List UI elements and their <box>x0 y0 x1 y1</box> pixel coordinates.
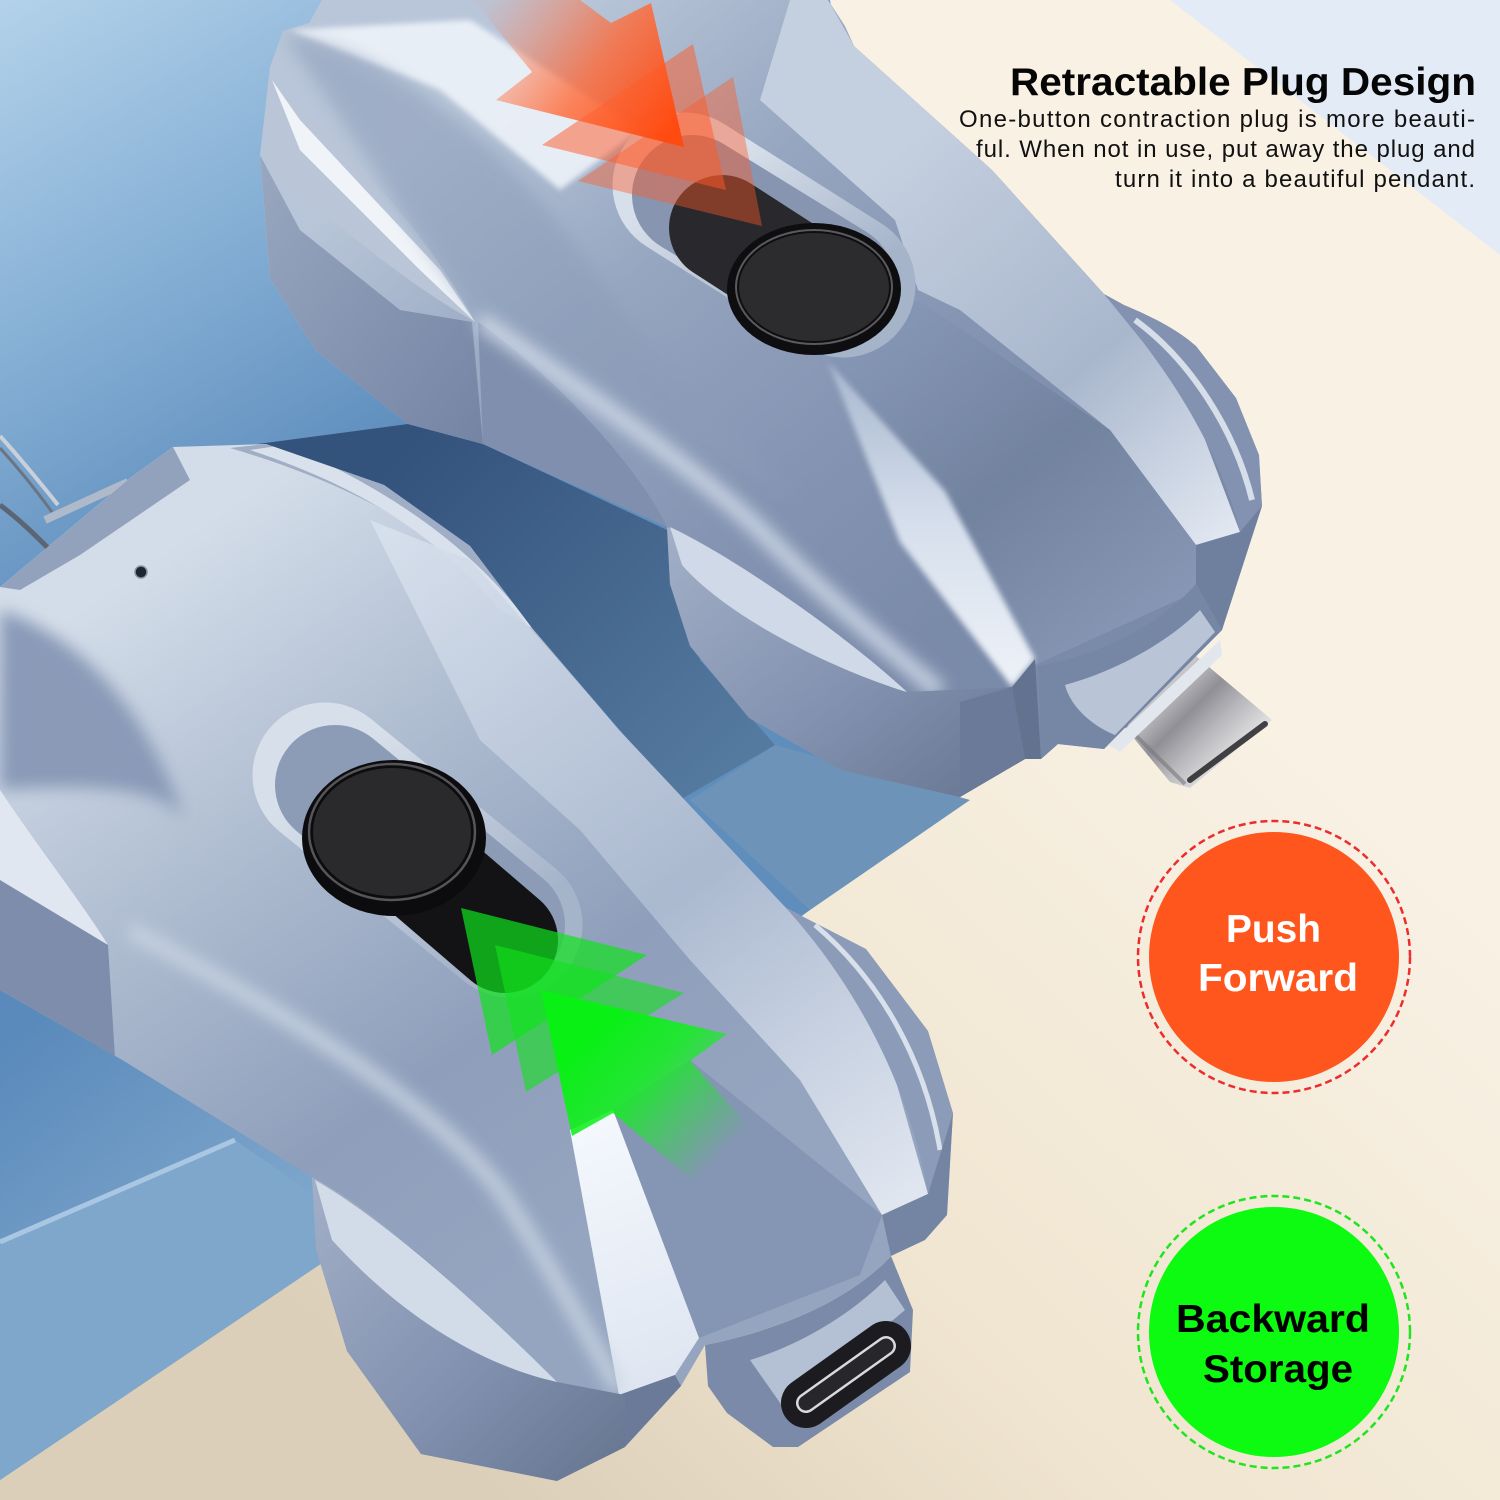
description text: One-button contraction plug is more beauti- <box>959 106 1475 133</box>
slot opening <box>722 228 815 288</box>
rear fender dark side <box>260 155 483 444</box>
hood dark centre <box>613 1060 882 1338</box>
USB-C plug <box>1117 656 1272 788</box>
rear window fin <box>265 80 475 322</box>
port housing <box>1038 584 1222 759</box>
USB-C socket <box>806 1346 886 1403</box>
badge: push forward: Forward <box>1198 957 1358 1000</box>
rear-right fender <box>1104 294 1262 532</box>
side panel <box>478 322 667 527</box>
USB-C port housing <box>705 1256 913 1447</box>
car body <box>0 444 953 1481</box>
background: pale blue top right corner <box>1170 0 1500 255</box>
hood dark centre <box>920 376 1196 664</box>
front wheel arch <box>667 527 1025 797</box>
slot recess <box>692 195 835 283</box>
background: blue surface <box>0 0 970 1480</box>
top end plate <box>0 447 190 590</box>
rear fender <box>0 610 185 820</box>
front wheel arch <box>312 1177 625 1481</box>
button slot ring <box>685 185 843 285</box>
rear roof dome <box>230 444 512 602</box>
title: Retractable Plug Design <box>1010 61 1476 104</box>
heading and description <box>959 61 1476 193</box>
badge: backward storage <box>1138 1196 1410 1468</box>
badge: push forward: Push <box>1226 908 1321 951</box>
body crease highlight <box>480 320 940 692</box>
key ring <box>0 436 128 548</box>
rear roof curve <box>287 32 588 334</box>
body crease highlight <box>130 930 619 1390</box>
slot recess <box>335 785 505 925</box>
slider button <box>727 223 901 355</box>
front facet <box>1196 506 1262 630</box>
product: top charger with plug out <box>260 0 1272 797</box>
slot opening <box>400 850 505 940</box>
right shoulder band <box>760 0 1240 545</box>
button slot ring <box>325 775 510 925</box>
badge: backward storage: Storage <box>1203 1348 1353 1391</box>
hood bright strip <box>828 362 1035 687</box>
description text: turn it into a beautiful pendant. <box>1115 166 1475 193</box>
slider button <box>302 760 486 916</box>
description text <box>959 106 1475 193</box>
green backward arrows <box>461 908 749 1181</box>
roof shine <box>290 20 640 190</box>
roof band <box>370 520 928 1215</box>
hood bright strip <box>570 1110 699 1395</box>
description text: ful. When not in use, put away the plug and <box>976 136 1475 163</box>
indicator dot <box>135 566 147 578</box>
badge: push forward <box>1138 821 1410 1093</box>
front right facet <box>882 1113 953 1256</box>
car body <box>260 0 1262 797</box>
rear-right fender <box>786 908 953 1215</box>
badge: backward storage: Backward <box>1176 1298 1370 1341</box>
red push arrows <box>473 0 762 226</box>
rear side panel <box>0 880 115 1058</box>
product: bottom charger with plug stored <box>0 436 953 1481</box>
